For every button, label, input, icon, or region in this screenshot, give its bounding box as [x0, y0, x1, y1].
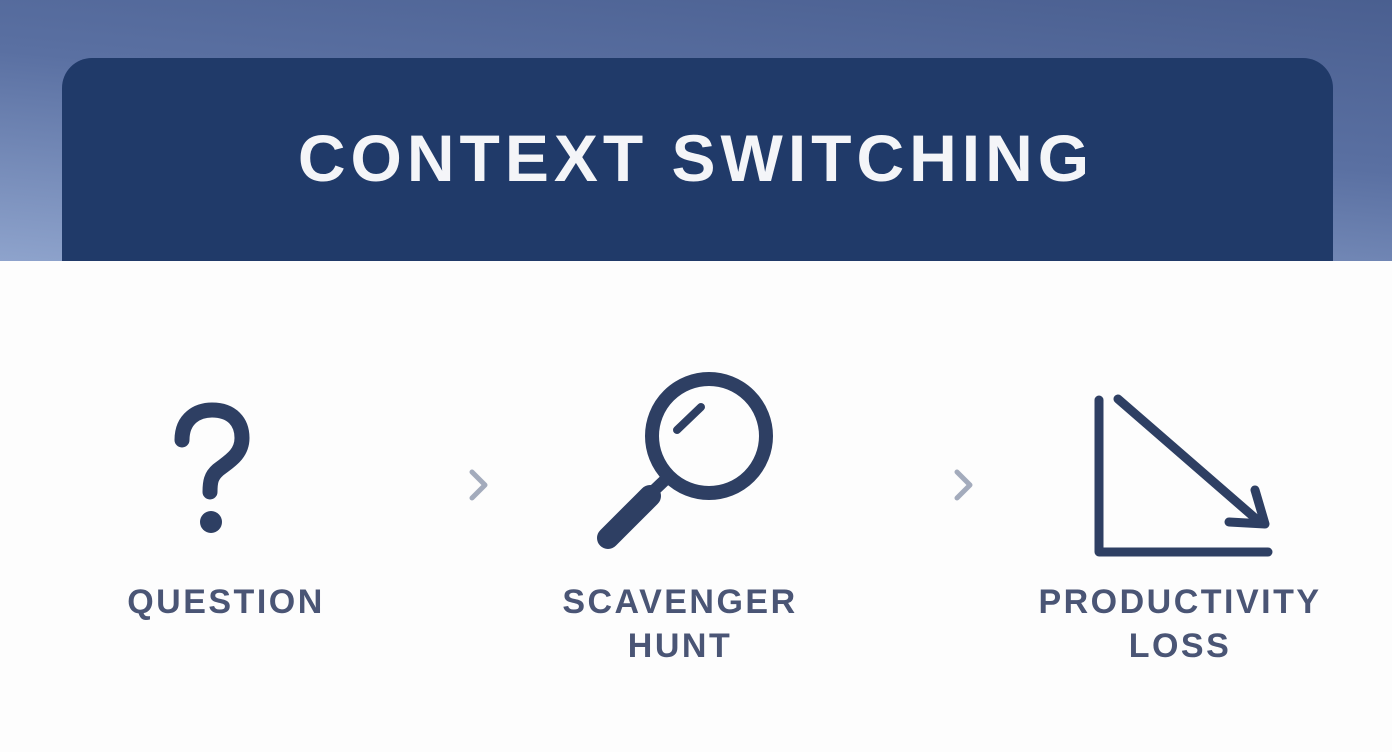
label: question: QUESTION — [127, 583, 325, 621]
label: productivity loss: LOSS — [1129, 627, 1231, 665]
label: scavenger hunt: HUNT — [628, 627, 732, 665]
label: scavenger hunt — [562, 583, 798, 665]
label: productivity loss — [1038, 583, 1322, 665]
label: scavenger hunt: SCAVENGER — [562, 583, 798, 621]
header background — [0, 0, 1392, 261]
icon: declining chart — [1094, 394, 1272, 556]
label: productivity loss: PRODUCTIVITY — [1038, 583, 1322, 621]
icon: magnifier — [597, 372, 773, 549]
title panel — [62, 58, 1333, 261]
arrow: chevron 1 — [470, 470, 488, 500]
arrow: chevron 2 — [954, 470, 972, 500]
title: CONTEXT SWITCHING — [298, 121, 1094, 195]
